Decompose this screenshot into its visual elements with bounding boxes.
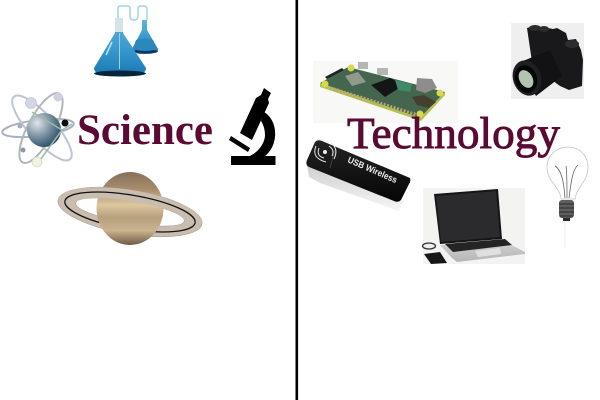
label: USB Wireless: USB Wireless bbox=[346, 155, 399, 185]
icon: microscope bbox=[229, 88, 276, 165]
heading: Technology: Technology bbox=[347, 109, 560, 158]
icon: chemistry flasks bbox=[94, 6, 158, 76]
center divider line bbox=[296, 0, 298, 400]
icon: Saturn bbox=[54, 172, 206, 246]
icon: light bulb bbox=[547, 147, 588, 248]
photo: camera bbox=[508, 23, 584, 99]
photo: USB wireless adapter bbox=[306, 140, 410, 211]
photo: laptop bbox=[422, 188, 525, 264]
heading: Science: Science bbox=[77, 107, 213, 154]
icon: atom bbox=[1, 87, 80, 169]
photo: single-board computer bbox=[313, 61, 458, 123]
